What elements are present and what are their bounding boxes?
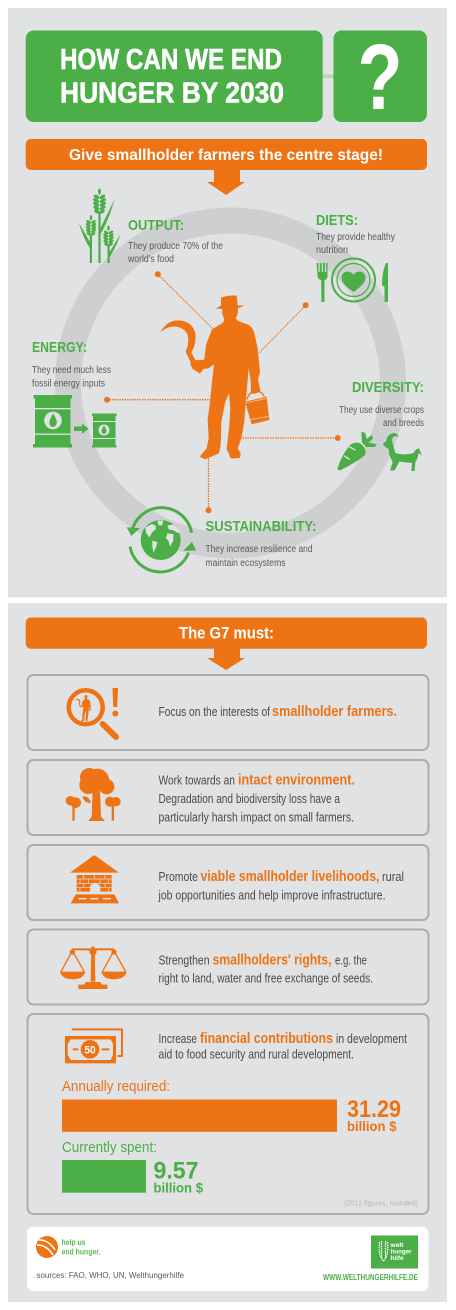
question mark box <box>334 25 427 129</box>
plate <box>332 258 375 302</box>
chart: currently spent <box>62 1140 203 1196</box>
chart: annually required: billion $ <box>347 1119 397 1134</box>
text: energy: They need much less <box>32 365 111 376</box>
connector between title and question mark <box>322 75 334 78</box>
icon: oil barrels <box>33 395 116 448</box>
logo: welthungerhilfe <box>371 1236 418 1268</box>
icon: globe with cycle arrows <box>127 508 196 572</box>
box: smallholders' rights: right to land, water and free exchange of seeds. <box>158 970 373 986</box>
knife <box>382 263 388 302</box>
icon: brick house <box>70 855 119 903</box>
banner: centre stage: Give smallholder farmers the centre stage! <box>69 147 383 164</box>
connector: diversity <box>240 435 341 441</box>
text: diversity: and breeds <box>383 418 424 429</box>
chart: annually required <box>62 1079 401 1134</box>
box: intact environment <box>28 760 428 835</box>
ring <box>68 220 393 546</box>
icon: banknotes <box>65 1029 122 1063</box>
title box: HUNGER BY 2030 <box>60 78 284 110</box>
logo: help us end hunger: end hunger. <box>62 1248 100 1256</box>
text: sustainability: They increase resilience and <box>206 544 312 555</box>
icon: wheat <box>79 188 120 263</box>
text: output <box>127 217 223 265</box>
logo: welthungerhilfe: hunger <box>390 1248 412 1256</box>
box: intact environment: intact environment. <box>238 772 355 788</box>
banner: the G7 must <box>26 618 427 649</box>
text: sustainability: SUSTAINABILITY: <box>206 518 316 535</box>
box: financial contributions: Increase <box>158 1031 197 1046</box>
sickle <box>160 320 196 364</box>
title box: HOW CAN WE END <box>60 44 282 76</box>
box: intact environment: particularly harsh impact on small farmers. <box>158 810 354 824</box>
box: smallholders' rights: e.g. the <box>335 952 367 968</box>
box: financial contributions: aid to food security and rural development. <box>158 1046 354 1062</box>
box: viable livelihoods: job opportunities and help improve infrastructure. <box>158 888 386 902</box>
text: diversity: They use diverse crops <box>339 405 424 416</box>
box: viable livelihoods: rural <box>382 869 404 884</box>
chart: currently spent: billion $ <box>154 1180 203 1196</box>
logo: welthungerhilfe: welt <box>389 1242 404 1249</box>
box: viable livelihoods <box>28 845 428 920</box>
question mark box: ? <box>358 25 402 129</box>
text: output: world's food <box>127 254 174 265</box>
icon: magnifier <box>69 688 118 737</box>
icon: carrot and goat <box>337 432 422 471</box>
chart: currently spent: Currently spent: <box>62 1140 157 1156</box>
box: intact environment: Work towards an <box>158 772 235 788</box>
text: output: They produce 70% of the <box>128 241 223 252</box>
box: smallholder farmers: smallholder farmers. <box>272 704 397 720</box>
box: financial contributions: financial contributions <box>200 1031 333 1047</box>
website: WWW.WELTHUNGERHILFE.DE <box>323 1273 418 1282</box>
bucket <box>245 391 269 424</box>
farmer figure <box>160 296 269 459</box>
text: diversity: DIVERSITY: <box>352 379 424 396</box>
text: energy: ENERGY: <box>32 339 87 356</box>
box: financial contributions <box>28 1014 428 1214</box>
box: smallholders' rights: Strengthen <box>158 952 210 968</box>
text: sustainability <box>206 518 316 569</box>
text: sustainability: maintain ecosystems <box>206 558 286 569</box>
box: smallholders' rights <box>28 930 428 1004</box>
text: diets: They provide healthy <box>316 232 395 243</box>
connector: diets <box>258 302 309 354</box>
title box <box>26 30 323 122</box>
box: financial contributions: in development <box>336 1031 407 1046</box>
box: viable livelihoods: viable smallholder livelihoods, <box>200 869 380 885</box>
box: smallholders' rights: smallholders' rights, <box>212 952 332 968</box>
text: energy: fossil energy inputs <box>32 378 105 390</box>
text: energy <box>32 339 111 390</box>
sources: sources: FAO, WHO, UN, Welthungerhilfe <box>36 1270 184 1280</box>
arrow: down from G7 banner <box>207 648 245 670</box>
logo: help us end hunger <box>36 1236 100 1258</box>
panel: bottom background <box>8 603 447 1302</box>
box: intact environment: Degradation and biodiversity loss have a <box>158 791 341 806</box>
text: diversity <box>339 379 424 429</box>
box: smallholder farmers: Focus on the interests of <box>158 704 270 719</box>
connector: output <box>155 271 213 329</box>
connector: energy <box>104 397 212 403</box>
chart: annually required: Annually required: <box>62 1079 170 1095</box>
box: viable livelihoods: Promote <box>158 869 198 884</box>
icon: banknotes: 50 <box>84 1044 96 1056</box>
icon: plate and cutlery <box>316 258 388 302</box>
chart: annually required: 31.29 <box>347 1096 401 1123</box>
panel: top background <box>8 8 447 598</box>
icon: scales <box>60 947 127 989</box>
text: diets: nutrition <box>316 245 348 256</box>
chart: currently spent: 9.57 <box>154 1158 198 1184</box>
arrow: down from banner <box>207 170 245 195</box>
footer <box>27 1227 428 1291</box>
connector: sustainability <box>206 458 212 513</box>
text: diets <box>316 212 395 256</box>
logo: welthungerhilfe: hilfe <box>390 1255 404 1262</box>
note: figures year: (2012 figures, rounded) <box>344 1198 418 1208</box>
text: output: OUTPUT: <box>128 217 184 234</box>
text: diets: DIETS: <box>316 212 358 229</box>
banner: the G7 must: The G7 must: <box>179 624 274 642</box>
logo: help us end hunger: help us <box>62 1238 86 1247</box>
fork <box>316 263 328 302</box>
icon: trees <box>66 768 121 821</box>
banner: centre stage <box>26 139 427 170</box>
box: smallholder farmers <box>28 675 428 750</box>
carrot <box>337 432 377 470</box>
goat <box>383 433 422 471</box>
